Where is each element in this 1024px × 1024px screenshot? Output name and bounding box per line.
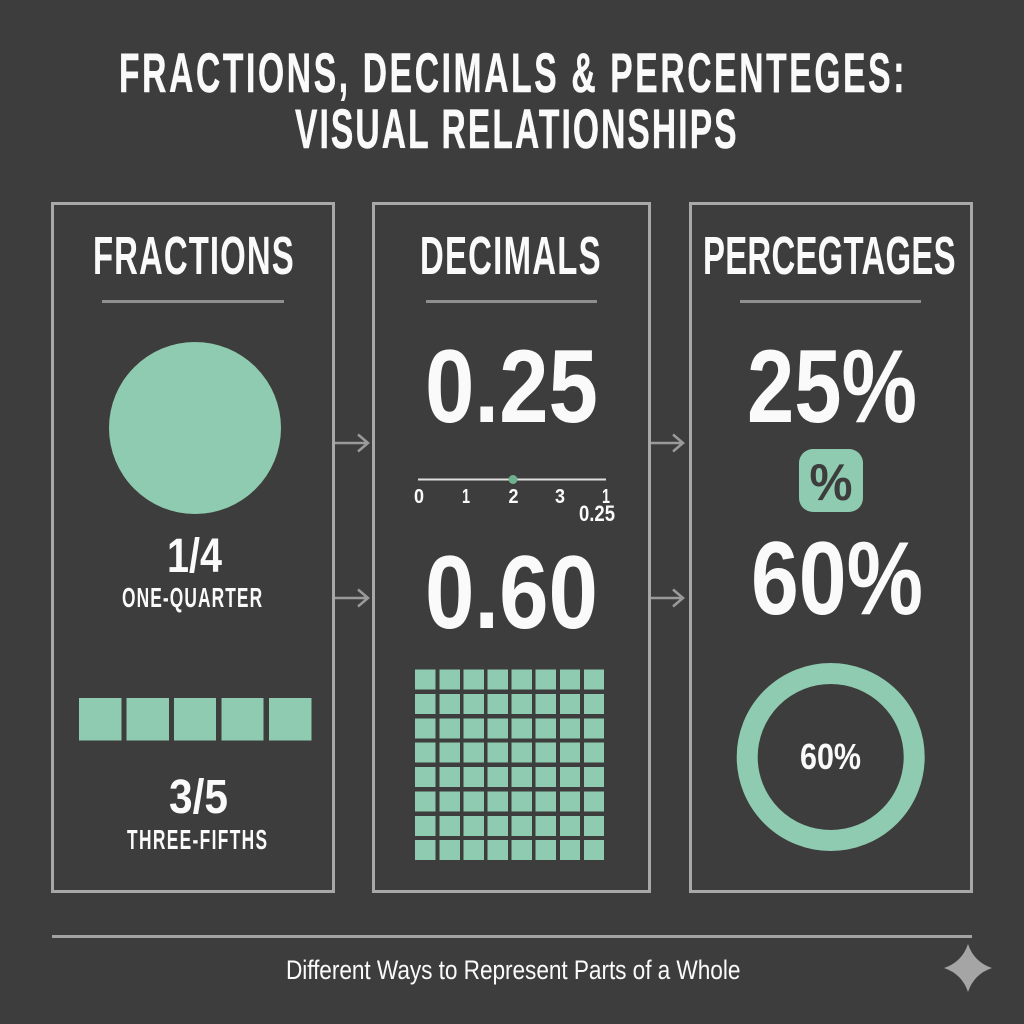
number line: 0.25	[579, 501, 615, 526]
arrow: decimals to percentages bottom	[651, 590, 683, 606]
panel: decimals	[374, 204, 650, 892]
value 0.25: 0.25	[425, 329, 598, 445]
number line: 2	[508, 486, 518, 508]
title	[119, 41, 904, 160]
fraction label 3/5	[127, 771, 267, 855]
value 0.60: 0.60	[425, 535, 598, 651]
heading: decimals: DECIMALS	[420, 227, 601, 286]
arrow: fractions to decimals top	[335, 434, 368, 452]
title: FRACTIONS, DECIMALS & PERCENTEGES:	[119, 41, 904, 104]
fraction label 1/4: 1/4	[167, 530, 222, 583]
number line: 3	[555, 486, 565, 508]
arrow: decimals to percentages top	[651, 434, 683, 452]
value 60%: 60%	[751, 521, 923, 637]
value 25%: 25%	[747, 329, 917, 445]
arrow: fractions to decimals bottom	[335, 590, 368, 606]
panel: fractions	[52, 204, 334, 892]
heading: fractions: FRACTIONS	[93, 227, 294, 286]
fraction label 3/5: THREE-FIFTHS	[127, 824, 267, 855]
icon: circle one quarter	[109, 342, 281, 514]
footer caption: Different Ways to Represent Parts of a Whole	[286, 955, 740, 985]
icon: percent badge	[799, 449, 863, 512]
number line: 1	[602, 486, 610, 508]
grid of squares	[415, 670, 604, 860]
icon: four-point star	[944, 944, 992, 992]
fraction label 3/5: 3/5	[169, 771, 228, 824]
heading: percentages: PERCEGTAGES	[703, 227, 956, 286]
panel: percentages	[690, 204, 972, 892]
icon: percent badge: %	[810, 454, 852, 512]
fraction label 1/4: ONE-QUARTER	[122, 582, 262, 613]
donut chart	[747, 674, 914, 840]
number line: 1	[462, 486, 470, 508]
number line	[414, 475, 615, 526]
donut chart: 60%	[800, 736, 861, 777]
number line: 0	[414, 486, 424, 508]
fraction label 1/4	[122, 530, 262, 613]
bar of five squares	[79, 698, 312, 740]
title: VISUAL RELATIONSHIPS	[295, 97, 737, 160]
